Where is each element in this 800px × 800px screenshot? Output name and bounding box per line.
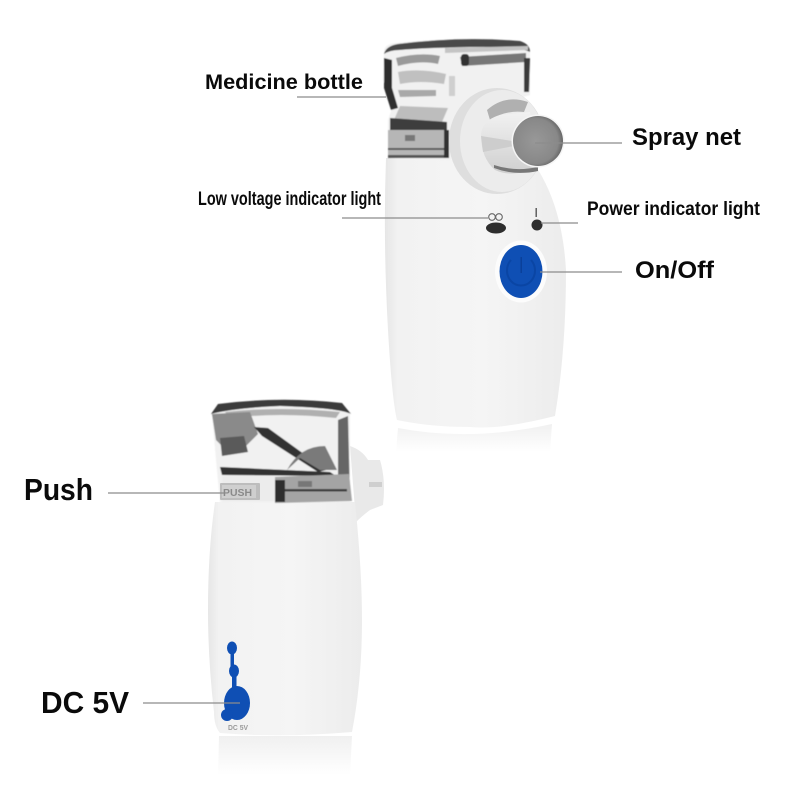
on/off button xyxy=(495,240,547,302)
device: side view nebulizer xyxy=(208,400,384,775)
reflection under side device xyxy=(218,736,352,775)
label: On/Off: On/Off xyxy=(635,257,715,284)
label: Push: Push xyxy=(24,472,93,507)
label: Medicine bottle: Medicine bottle xyxy=(205,71,363,94)
mouthpiece ring and tube xyxy=(449,88,564,194)
leader lines xyxy=(108,97,622,703)
label: Low voltage indicator light: Low voltage indicator light xyxy=(198,189,382,210)
reflection under front device xyxy=(396,424,552,452)
icon: low voltage indicator symbol xyxy=(489,214,502,220)
label: Spray net: Spray net xyxy=(632,124,741,151)
DC 5V port cover xyxy=(221,642,250,721)
DC 5V port label: DC 5V xyxy=(228,725,248,732)
medicine bottle chamber xyxy=(211,400,352,503)
icon: power indicator mark xyxy=(536,208,537,217)
device: front view nebulizer xyxy=(383,39,566,452)
body: front device xyxy=(385,158,566,428)
body: side device xyxy=(208,502,362,735)
nozzle xyxy=(350,446,384,522)
low voltage indicator light xyxy=(486,222,506,234)
push button: PUSH xyxy=(223,488,252,499)
label: DC 5V: DC 5V xyxy=(41,685,129,720)
label: Power indicator light: Power indicator light xyxy=(587,199,761,220)
medicine bottle chamber xyxy=(383,39,530,160)
power indicator light xyxy=(532,220,542,230)
push button xyxy=(220,483,260,500)
bottle collar xyxy=(388,130,447,158)
